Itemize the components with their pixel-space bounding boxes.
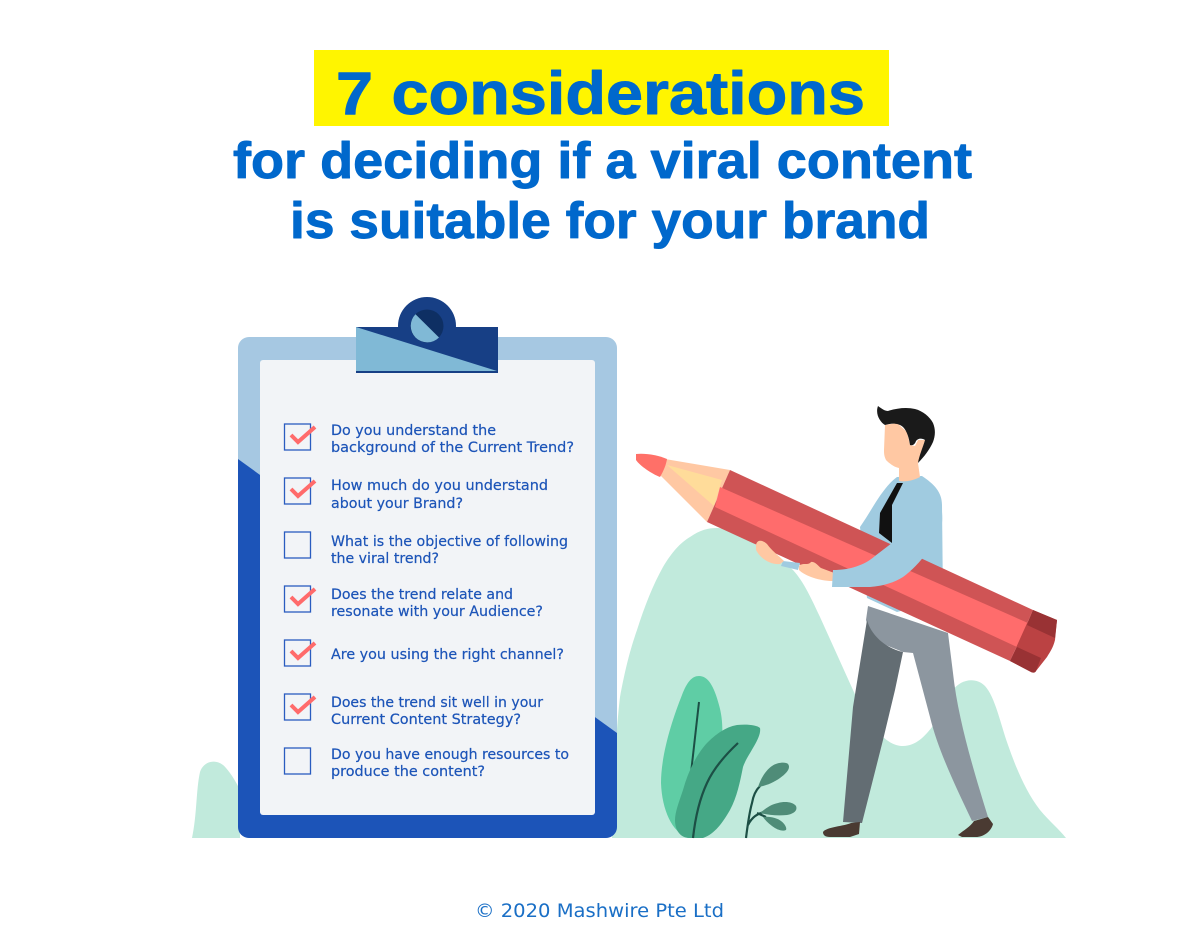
clipboard xyxy=(238,297,617,838)
pencil: body xyxy=(707,470,1033,661)
clip xyxy=(356,297,498,373)
title highlight xyxy=(314,50,889,126)
checklist item 1: Do you understand the xyxy=(331,423,496,439)
man: hair xyxy=(877,406,935,463)
checklist item 4: Does the trend relate and xyxy=(331,587,513,603)
checklist item 3: the viral trend? xyxy=(331,551,439,567)
left sleeve cuff xyxy=(781,561,800,570)
pencil: end cap xyxy=(1010,610,1057,673)
right arm sleeve xyxy=(832,492,942,587)
checklist item 7: produce the content? xyxy=(331,764,485,780)
checklist item 6 xyxy=(284,694,543,728)
checklist item 1 xyxy=(284,423,574,456)
pencil xyxy=(636,454,1057,673)
checklist item 4 xyxy=(284,586,543,620)
title: is suitable for your brand xyxy=(290,192,930,249)
plant: large leaves xyxy=(661,676,760,838)
title xyxy=(233,60,972,249)
man: arm and hands xyxy=(756,492,942,587)
checklist item 6: Current Content Strategy? xyxy=(331,712,521,728)
checklist item 6: Does the trend sit well in your xyxy=(331,695,543,711)
checklist item 2: How much do you understand xyxy=(331,478,548,494)
man: shoes xyxy=(823,817,993,837)
man: dark leg xyxy=(843,620,903,823)
checklist item 4: resonate with your Audience? xyxy=(331,604,543,620)
right hand xyxy=(799,562,838,581)
left hand xyxy=(756,541,784,564)
man: tie xyxy=(879,483,903,543)
checklist item 5 xyxy=(284,640,564,666)
checklist item 2: about your Brand? xyxy=(331,496,463,512)
checklist item 7 xyxy=(284,747,569,780)
clipboard paper xyxy=(260,360,595,815)
man xyxy=(823,406,993,837)
title: for deciding if a viral content xyxy=(233,132,972,189)
background hills xyxy=(192,528,1066,838)
title: 7 considerations xyxy=(336,60,865,127)
clipboard dark lower band xyxy=(238,459,617,838)
plant: small sprig xyxy=(746,763,796,838)
checklist item 1: background of the Current Trend? xyxy=(331,440,574,456)
copyright: © 2020 Mashwire Pte Ltd xyxy=(475,900,724,922)
checklist item 3: What is the objective of following xyxy=(331,534,568,550)
pencil: wood tip xyxy=(660,459,730,522)
pencil: lead xyxy=(636,454,667,477)
checklist item 7: Do you have enough resources to xyxy=(331,747,569,763)
checklist item 3 xyxy=(284,532,568,567)
checklist item 5: Are you using the right channel? xyxy=(331,647,564,663)
man: torso xyxy=(860,476,943,612)
man: light leg xyxy=(866,606,988,821)
checklist item 2 xyxy=(284,478,548,512)
man: face and neck xyxy=(884,423,925,481)
clipboard board xyxy=(238,337,617,838)
